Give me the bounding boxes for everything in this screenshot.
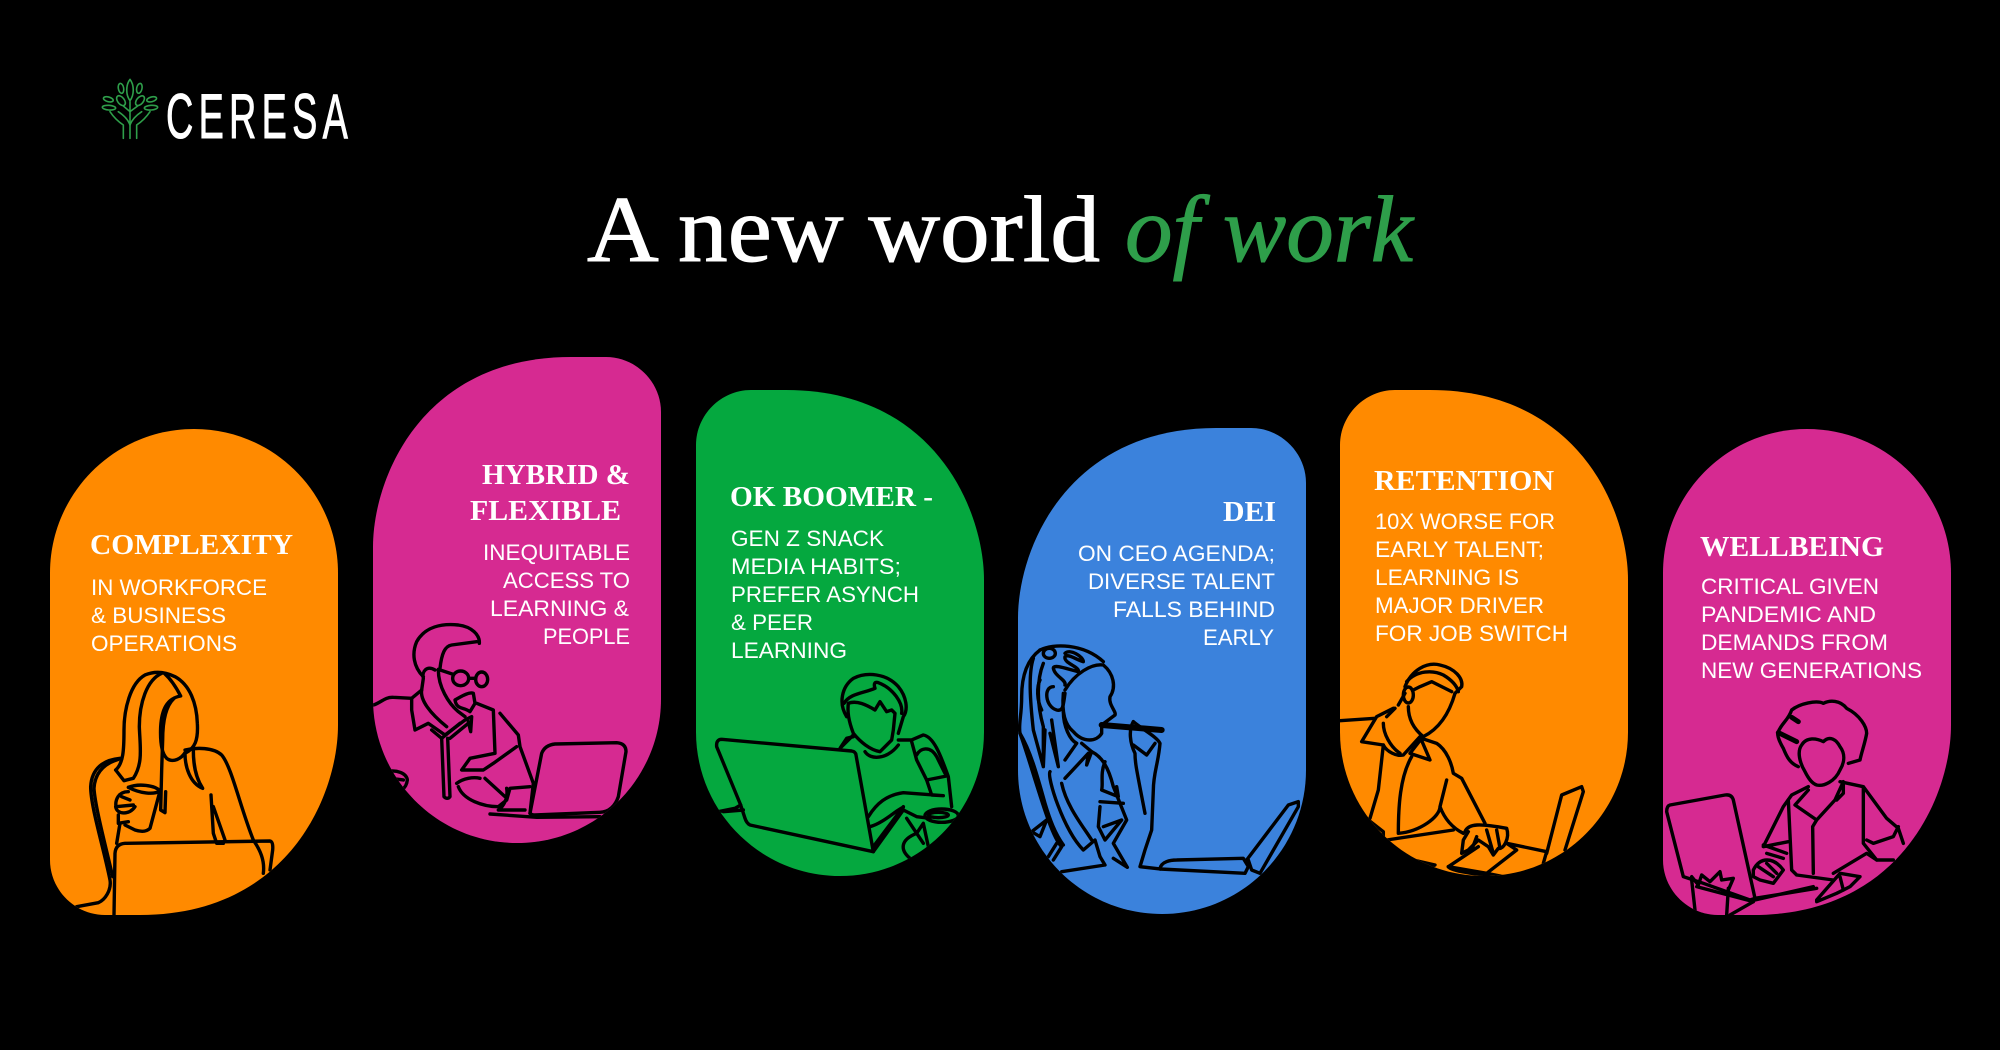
- panel shape: [50, 429, 338, 915]
- title: [587, 178, 1415, 282]
- body text: GEN Z SNACK: [731, 526, 884, 551]
- panel: dei: [1018, 428, 1306, 914]
- body text: ON CEO AGENDA;: [1078, 541, 1275, 566]
- heading: WELLBEING: [1700, 531, 1884, 563]
- body text: EARLY: [1203, 625, 1274, 650]
- illustration: man typing at laptop: [1340, 664, 1583, 877]
- body text: LEARNING IS: [1375, 565, 1519, 590]
- panel: ok boomer: [696, 390, 984, 876]
- body text: 10X WORSE FOR: [1375, 509, 1555, 534]
- body text: & BUSINESS: [91, 603, 226, 628]
- illustration: man with glasses at laptop: [373, 625, 626, 817]
- body text: MAJOR DRIVER: [1375, 593, 1544, 618]
- wordmark: CERESA: [166, 82, 353, 153]
- illustration: woman with pen and ponytail: [1020, 646, 1298, 873]
- title: of work: [1125, 178, 1415, 282]
- panel: hybrid and flexible: [373, 357, 661, 843]
- body text: DIVERSE TALENT: [1088, 569, 1275, 594]
- body text: MEDIA HABITS;: [731, 554, 901, 579]
- body text: ACCESS TO: [503, 568, 630, 593]
- panel shape: [373, 357, 661, 843]
- body text: [1701, 574, 1922, 683]
- body text: FOR JOB SWITCH: [1375, 621, 1568, 646]
- panel shape: [696, 390, 984, 876]
- body text: PEOPLE: [543, 624, 630, 649]
- panel: wellbeing: [1663, 429, 1951, 915]
- heading: OK BOOMER -: [730, 481, 933, 513]
- illustration: woman with coffee at laptop: [77, 672, 273, 915]
- body text: & PEER: [731, 610, 813, 635]
- panel: complexity: [50, 429, 338, 915]
- body text: DEMANDS FROM: [1701, 630, 1888, 655]
- body text: [483, 540, 630, 649]
- logo: Ceresa: [102, 79, 353, 153]
- heading: COMPLEXITY: [90, 529, 293, 561]
- panel shape: [1018, 428, 1306, 914]
- icon: tree with hands: [102, 79, 158, 138]
- body text: FALLS BEHIND: [1113, 597, 1275, 622]
- body text: IN WORKFORCE: [91, 575, 267, 600]
- body text: NEW GENERATIONS: [1701, 658, 1922, 683]
- body text: PANDEMIC AND: [1701, 602, 1876, 627]
- body text: [91, 575, 267, 656]
- body text: [1078, 541, 1275, 650]
- body text: [1375, 509, 1568, 646]
- illustration: woman with curly hair at laptop: [1667, 701, 1903, 915]
- body text: PREFER ASYNCH: [731, 582, 919, 607]
- panel shape: [1340, 390, 1628, 876]
- body text: [731, 526, 919, 663]
- title: A new world: [587, 178, 1100, 282]
- body text: CRITICAL GIVEN: [1701, 574, 1879, 599]
- heading: [470, 459, 630, 527]
- panel shape: [1663, 429, 1951, 915]
- body text: OPERATIONS: [91, 631, 237, 656]
- panel: retention: [1340, 390, 1628, 877]
- heading: HYBRID &: [482, 459, 630, 491]
- body text: INEQUITABLE: [483, 540, 630, 565]
- heading: FLEXIBLE: [470, 495, 621, 527]
- body text: LEARNING: [731, 638, 847, 663]
- body text: LEARNING &: [490, 596, 629, 621]
- body text: EARLY TALENT;: [1375, 537, 1544, 562]
- heading: DEI: [1223, 496, 1276, 528]
- heading: RETENTION: [1374, 465, 1554, 497]
- illustration: young man behind laptop: [717, 675, 958, 858]
